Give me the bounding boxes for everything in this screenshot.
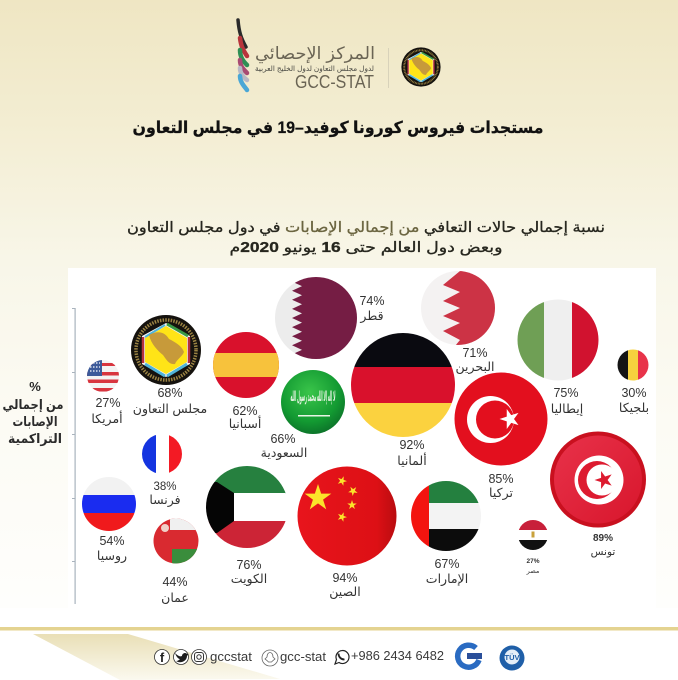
infographic canvas: لا إله إلا الله محمد رسول الله bbox=[290, 388, 336, 405]
country name: تونس bbox=[591, 546, 615, 558]
flag: UAE bbox=[410, 480, 482, 551]
item: Turkey 85% bbox=[454, 372, 548, 501]
icon: snapchat bbox=[262, 650, 278, 666]
item: USA 27% bbox=[87, 360, 123, 427]
handle: gcc-stat: gcc-stat bbox=[280, 650, 327, 664]
value: 68% bbox=[157, 386, 183, 400]
item: GCC 68% bbox=[131, 315, 207, 417]
item: Russia 54% bbox=[82, 477, 136, 564]
icon: certification G mark bbox=[458, 645, 482, 667]
logo ribbon bbox=[238, 20, 247, 90]
value: 85% bbox=[488, 472, 514, 486]
item: Belgium 30% bbox=[617, 349, 650, 415]
item: China 94% bbox=[298, 466, 396, 600]
item: Germany 92% bbox=[351, 333, 455, 468]
icon: TUV mark bbox=[500, 646, 524, 670]
flag: Bahrain bbox=[421, 271, 496, 346]
flag: China bbox=[298, 466, 396, 566]
country name: مصر bbox=[526, 568, 539, 575]
value: 94% bbox=[332, 571, 358, 585]
title: مستجدات فيروس كورونا كوفيد–19 في مجلس التعاون bbox=[133, 119, 544, 138]
chart panel bbox=[68, 268, 656, 608]
icon: facebook: f bbox=[160, 650, 165, 665]
logo emblem bbox=[401, 47, 441, 87]
flag: Russia bbox=[82, 477, 136, 531]
icon: twitter bbox=[174, 650, 188, 664]
country name: البحرين bbox=[455, 360, 495, 375]
footer contacts bbox=[154, 645, 524, 670]
flag: Oman bbox=[153, 518, 199, 565]
country name: أسبانيا bbox=[229, 415, 261, 431]
value: 71% bbox=[462, 346, 488, 360]
axis label: التراكمية bbox=[8, 431, 62, 446]
value: 75% bbox=[553, 386, 579, 400]
value: 92% bbox=[399, 438, 425, 452]
country name: قطر bbox=[359, 309, 384, 324]
flag: Kuwait bbox=[206, 466, 286, 548]
logo arabic name: المركز الإحصائي bbox=[255, 44, 375, 64]
subtitle line 1: نسبة إجمالي حالات التعافي من إجمالي الإصابات في دول مجلس التعاون bbox=[127, 220, 605, 236]
item: Egypt 27% bbox=[518, 519, 548, 575]
flag: France bbox=[142, 434, 183, 474]
item: Kuwait 76% bbox=[200, 466, 288, 587]
value: 62% bbox=[232, 404, 258, 418]
flag: Qatar bbox=[275, 277, 360, 359]
subtitle bbox=[127, 220, 605, 256]
flag: Germany bbox=[351, 333, 455, 438]
country name: الإمارات bbox=[426, 572, 468, 587]
value: 44% bbox=[162, 575, 188, 589]
flag: GCC emblem bbox=[131, 315, 201, 385]
item: Oman 44% bbox=[153, 518, 199, 605]
item: Saudi Arabia 66% bbox=[261, 370, 345, 461]
flag: Belgium bbox=[617, 349, 650, 381]
country name: إيطاليا bbox=[551, 402, 583, 416]
value: 67% bbox=[434, 557, 460, 571]
country name: بلجيكا bbox=[619, 401, 649, 415]
axis label: الإصابات bbox=[12, 414, 58, 429]
country name: مجلس التعاون bbox=[133, 402, 207, 417]
value: 38% bbox=[153, 481, 177, 493]
flag: Spain bbox=[213, 332, 279, 398]
flag: Egypt bbox=[518, 520, 548, 550]
flag: Turkey bbox=[454, 372, 548, 466]
item: Tunisia 89% bbox=[550, 432, 646, 558]
value: 66% bbox=[270, 432, 296, 446]
item: Spain 62% bbox=[213, 332, 279, 431]
value: 89% bbox=[593, 533, 613, 544]
icon: facebook bbox=[154, 650, 170, 665]
value: 30% bbox=[621, 386, 647, 400]
axis label bbox=[2, 379, 64, 446]
item: Bahrain 71% bbox=[421, 271, 496, 375]
country name: ألمانيا bbox=[397, 452, 427, 468]
logo arabic subtitle: لدول مجلس التعاون لدول الخليج العربية bbox=[255, 64, 374, 73]
y axis bbox=[72, 308, 76, 604]
icon: instagram bbox=[192, 650, 206, 664]
item: Italy 75% bbox=[517, 299, 599, 416]
icon: TUV mark: TÜV bbox=[504, 653, 520, 662]
handle: gccstat: gccstat bbox=[210, 650, 253, 664]
item: UAE 67% bbox=[410, 480, 482, 587]
item: Qatar 74% bbox=[275, 277, 385, 359]
icon: whatsapp bbox=[335, 651, 349, 664]
item: France 38% bbox=[142, 434, 183, 508]
phone number: +986 2434 6482 bbox=[351, 649, 444, 663]
flag: Tunisia bbox=[550, 432, 646, 528]
country name: الصين bbox=[329, 585, 361, 600]
country name: الكويت bbox=[231, 572, 267, 587]
country name: أمريكا bbox=[91, 410, 123, 427]
country name: السعودية bbox=[261, 446, 307, 461]
value: 27% bbox=[95, 396, 121, 410]
country name: روسيا bbox=[97, 549, 127, 564]
logo: GCC-STAT bbox=[238, 20, 441, 92]
footer band bbox=[0, 608, 678, 680]
value: 27% bbox=[526, 558, 540, 565]
logo wordmark: GCC-STAT bbox=[295, 72, 374, 92]
country name: عمان bbox=[161, 591, 189, 605]
value: 74% bbox=[359, 294, 385, 308]
subtitle line 2: وبعض دول العالم حتى 16 يونيو 2020م bbox=[230, 240, 502, 256]
value: 54% bbox=[99, 534, 125, 548]
country name: فرنسا bbox=[149, 493, 181, 508]
axis label: % bbox=[29, 379, 41, 394]
axis label: من إجمالي bbox=[2, 397, 64, 412]
country name: تركيا bbox=[489, 486, 513, 501]
flag: USA bbox=[87, 360, 119, 392]
value: 76% bbox=[236, 558, 262, 572]
flag: Italy bbox=[517, 299, 599, 381]
